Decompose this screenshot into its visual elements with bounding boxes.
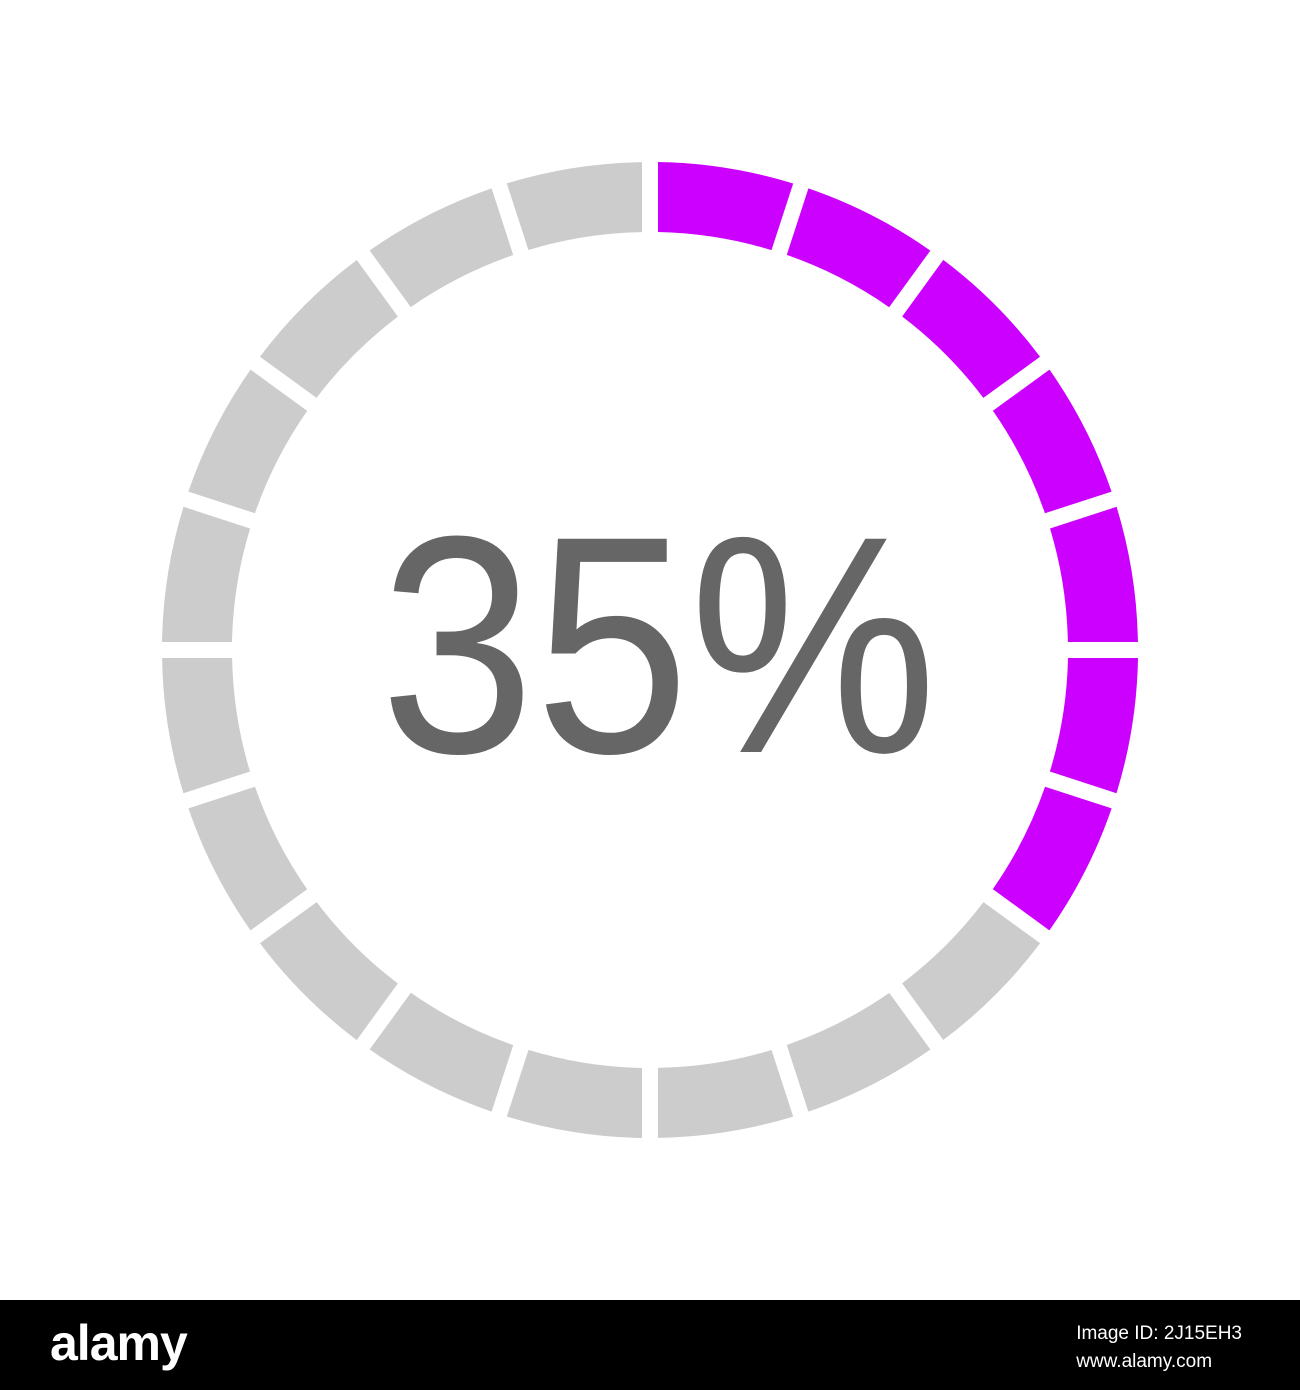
footer image id [1076,1323,1242,1372]
footer logo: alamy [50,1315,187,1371]
footer bar [0,1300,1300,1390]
footer image id: Image ID: 2J15EH3 [1076,1323,1242,1344]
footer image id: www.alamy.com [1076,1351,1212,1372]
percentage label: 35% [380,471,937,818]
ring segments [142,142,1158,1158]
